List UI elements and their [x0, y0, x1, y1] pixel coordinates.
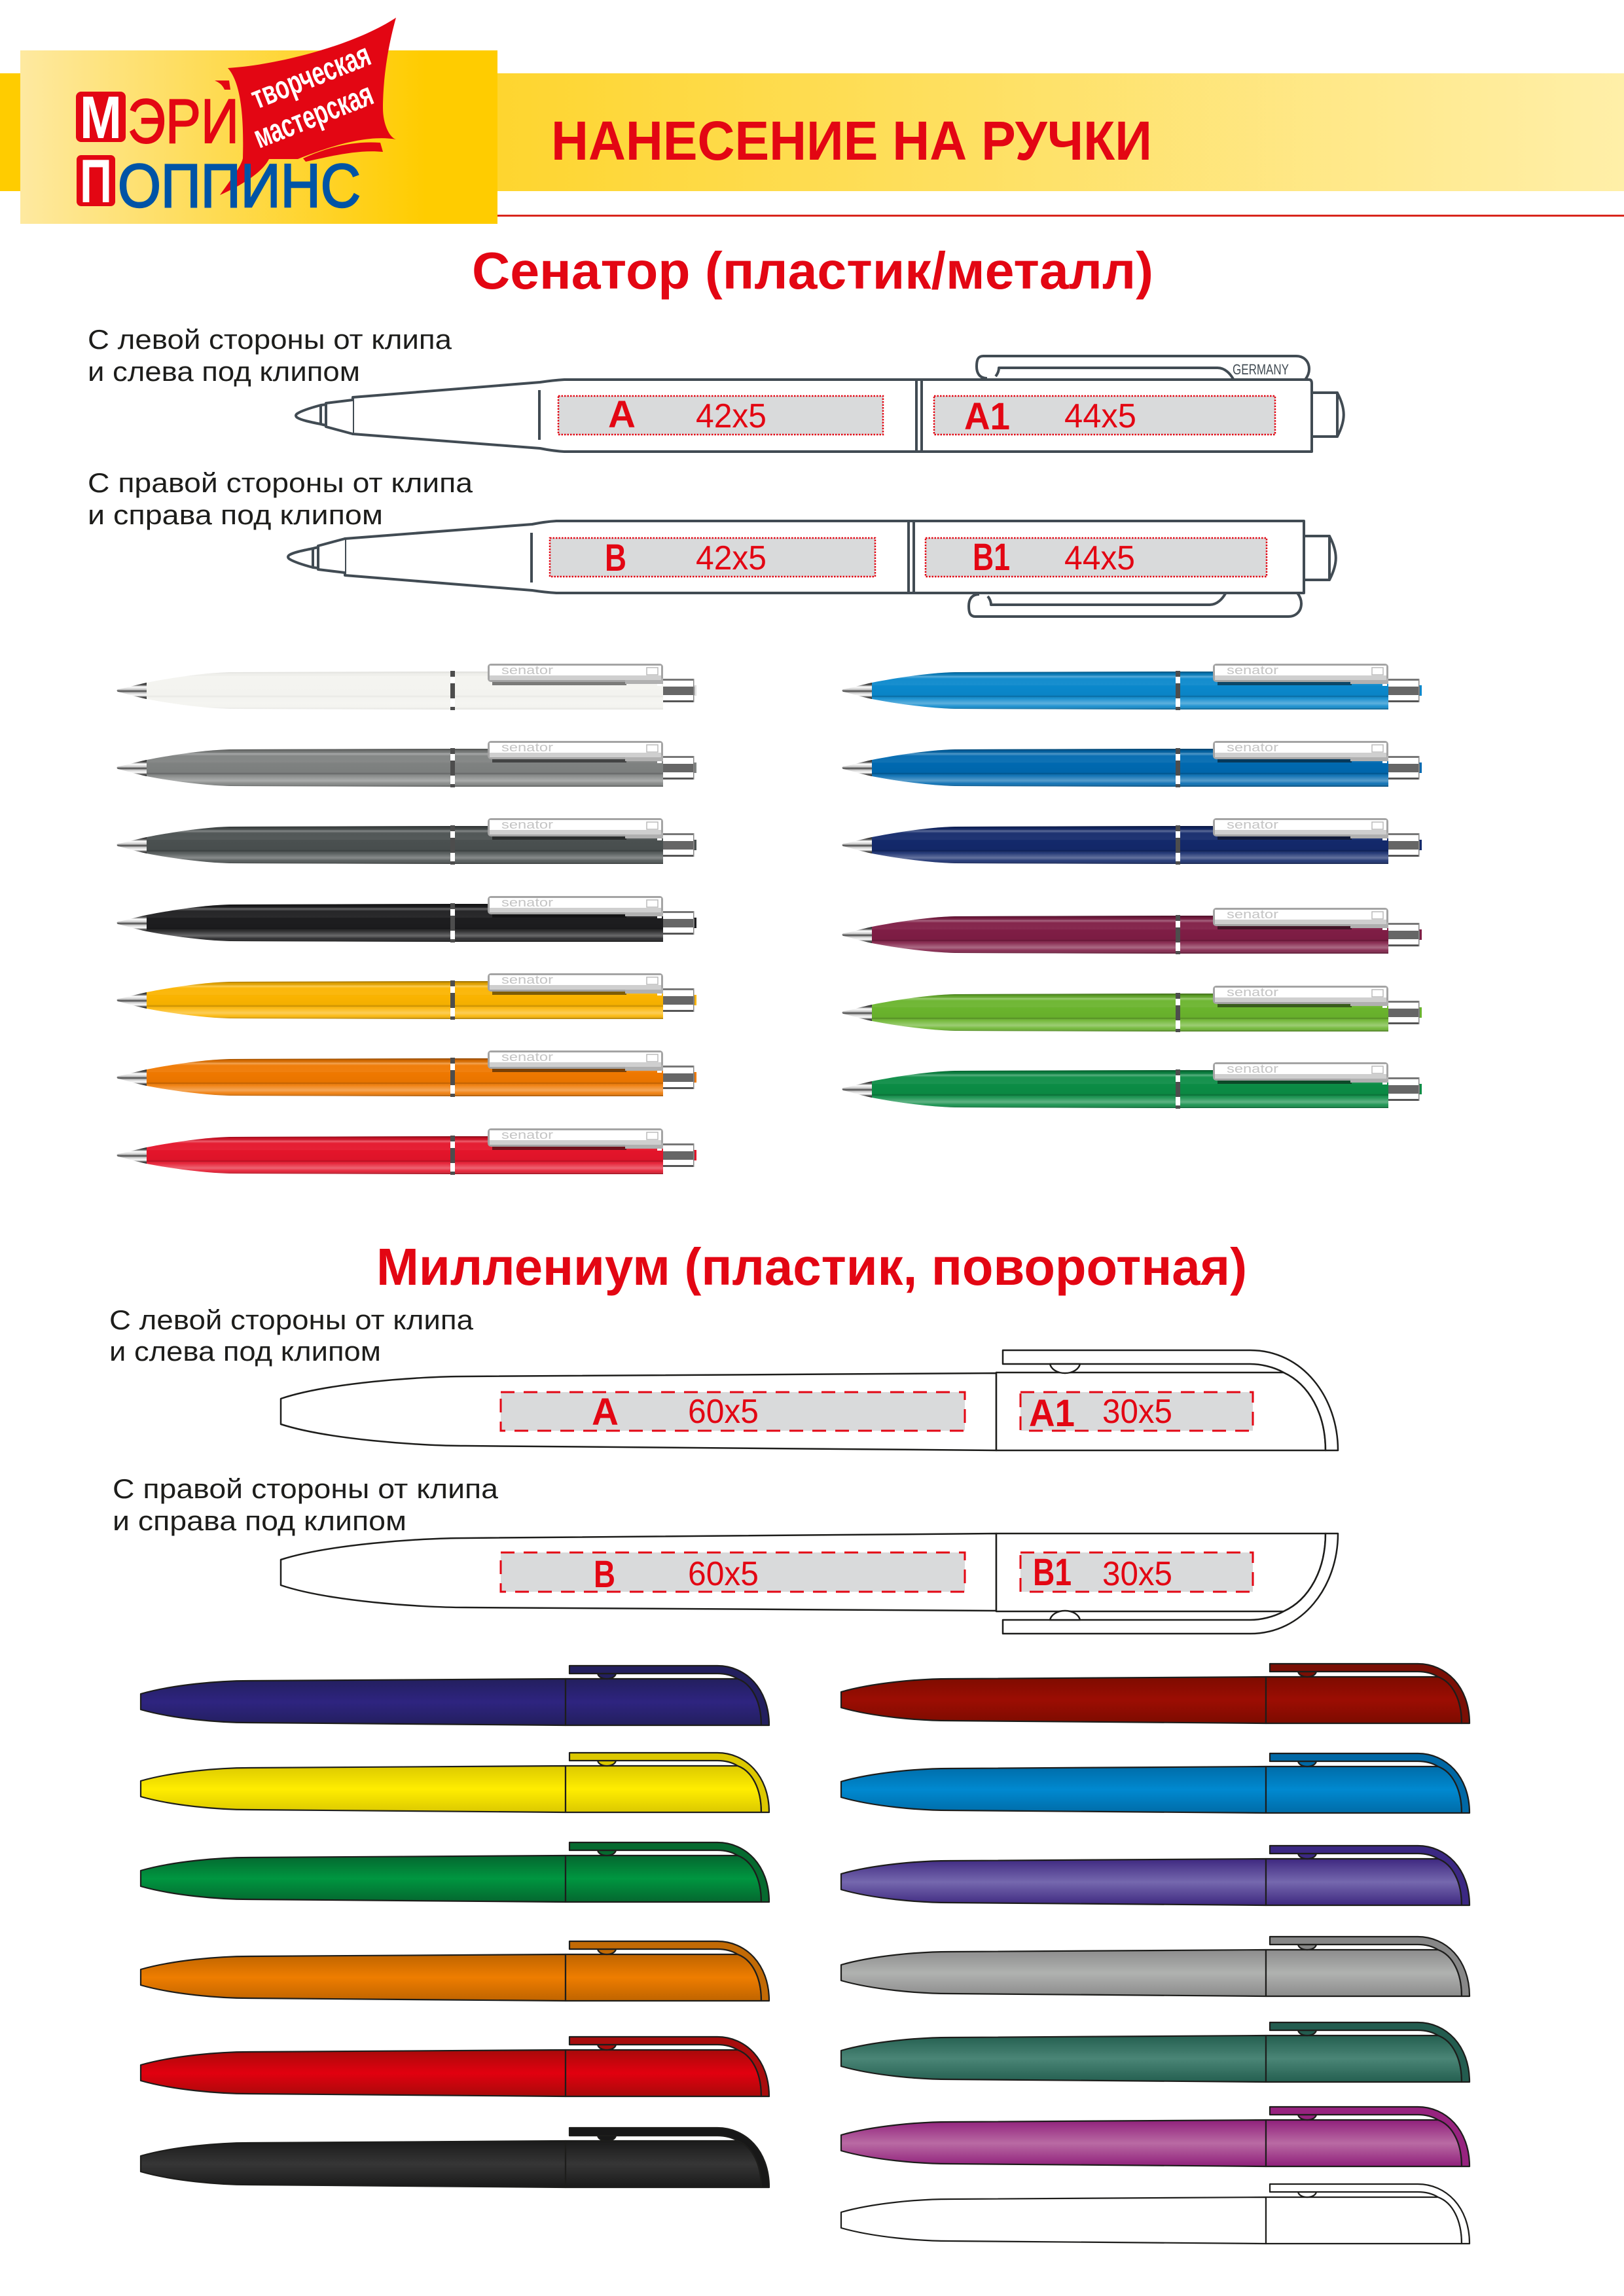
Millennium pen: blue: [841, 1753, 1470, 1813]
Senator pen: black: senator: [501, 896, 553, 909]
text: right side Senator: [88, 467, 473, 530]
Senator pen: maroon: senator: [1227, 908, 1278, 921]
Senator line drawing A: [296, 356, 1344, 452]
Millennium pen: red: [141, 2037, 769, 2096]
Senator pen: maroon: [842, 908, 1422, 954]
label A1: A1: [964, 395, 1010, 438]
text: right side Senator: С правой стороны от клипа: [88, 467, 473, 498]
logo letter П: П: [80, 147, 112, 215]
Senator pen: red: [117, 1128, 696, 1175]
text: left side Senator: и слева под клипом: [88, 356, 360, 387]
text: right side Millennium: [113, 1473, 499, 1536]
Millennium pen: teal: [841, 2022, 1470, 2082]
Millennium pen: green: [141, 1842, 769, 1902]
text: left side Senator: С левой стороны от клипа: [88, 324, 452, 355]
label A1: A1: [1029, 1392, 1075, 1435]
print area A1: [934, 396, 1275, 435]
text: right side Senator: и справа под клипом: [88, 499, 383, 530]
Millennium pen: magenta: [841, 2107, 1470, 2166]
logo red flag: [220, 18, 396, 195]
logo word ОППИНС: ОППИНС: [118, 151, 361, 220]
Senator pen: green: senator: [1227, 1062, 1278, 1075]
Senator pen: gray: senator: [501, 741, 553, 754]
Senator pen: lime: [842, 986, 1422, 1032]
size 42x5: 42x5: [696, 397, 767, 435]
Senator pen: light blue: [842, 664, 1422, 710]
size 30x5: 30x5: [1102, 1555, 1172, 1593]
print area B: [501, 1552, 965, 1592]
Millennium pen: gray: [841, 1937, 1470, 1996]
Senator pen: green: [842, 1062, 1422, 1109]
header band left stub: [0, 73, 20, 191]
logo letter М: М: [80, 84, 122, 151]
Senator line drawing B: [288, 521, 1336, 617]
size 44x5: 44x5: [1064, 397, 1136, 435]
heading: Миллениум: Миллениум (пластик, поворотная): [376, 1238, 1247, 1296]
print area A: [558, 396, 883, 435]
Millennium pen: orange: [141, 1941, 769, 2001]
Senator pen: graphite: senator: [501, 818, 553, 831]
size 44x5: 44x5: [1064, 539, 1135, 577]
Senator pen: red: senator: [501, 1128, 553, 1141]
logo sliver above И: [215, 81, 230, 90]
text: right side Millennium: С правой стороны от клипа: [113, 1473, 499, 1504]
print area B: [550, 538, 875, 577]
Millennium pen: navy: [141, 1666, 769, 1725]
Senator pen: white: [117, 664, 696, 710]
label B: B: [605, 537, 626, 579]
header band: [497, 73, 1624, 191]
logo flag text line 2: мастерская: [249, 75, 378, 155]
Senator pen: orange: [117, 1050, 696, 1097]
Senator pen: navy: senator: [1227, 818, 1278, 831]
title: НАНЕСЕНИЕ НА РУЧКИ: [551, 110, 1152, 171]
Millennium pen: yellow: [141, 1753, 769, 1812]
Millennium pen: black: [141, 2128, 769, 2187]
text: left side Millennium: и слева под клипом: [109, 1336, 381, 1367]
label A: A: [592, 1391, 619, 1433]
Senator pen: white: senator: [501, 664, 553, 677]
Senator pen: lime: senator: [1227, 986, 1278, 999]
Senator pen: orange: senator: [501, 1050, 553, 1064]
Millennium line drawing A: [281, 1350, 1338, 1450]
text: left side Millennium: С левой стороны от клипа: [109, 1304, 474, 1335]
label B: B: [594, 1553, 615, 1596]
logo flag text line 1: творческая: [246, 36, 376, 116]
logo word ЭРИ: ЭРИ: [128, 86, 239, 156]
text: left side Senator: [88, 324, 452, 387]
size 30x5: 30x5: [1102, 1393, 1172, 1431]
Senator pen: black: [117, 896, 696, 942]
Senator pen: graphite: [117, 818, 696, 865]
print area B1: [1020, 1552, 1253, 1592]
heading: Сенатор: Сенатор (пластик/металл): [472, 242, 1153, 300]
Millennium pen: purple: [841, 1846, 1470, 1905]
Millennium pen: dark red: [841, 1664, 1470, 1723]
header red rule: [497, 215, 1624, 217]
label B1: B1: [973, 536, 1010, 579]
Senator pen: gray: [117, 741, 696, 787]
size 60x5: 60x5: [688, 1555, 759, 1593]
logo: Мэри Поппинс творческая мастерская: [20, 18, 497, 224]
Senator pen: blue: senator: [1227, 741, 1278, 754]
Senator pen: yellow: senator: [501, 973, 553, 986]
print area A: [501, 1392, 965, 1431]
print area B1: [926, 538, 1267, 577]
Senator pen: light blue: senator: [1227, 664, 1278, 677]
Millennium line drawing B: [281, 1534, 1338, 1634]
size 42x5: 42x5: [696, 539, 767, 577]
GERMANY imprint: GERMANY: [1233, 361, 1289, 378]
Senator pen: blue: [842, 741, 1422, 787]
size 60x5: 60x5: [688, 1393, 759, 1431]
text: left side Millennium: [109, 1304, 474, 1367]
Millennium pen: white: [841, 2184, 1470, 2244]
label A: A: [608, 393, 636, 436]
text: right side Millennium: и справа под клипом: [113, 1505, 406, 1536]
Senator pen: yellow: [117, 973, 696, 1020]
Senator pen: navy: [842, 818, 1422, 865]
print area A1: [1020, 1392, 1253, 1431]
label B1: B1: [1033, 1551, 1072, 1594]
